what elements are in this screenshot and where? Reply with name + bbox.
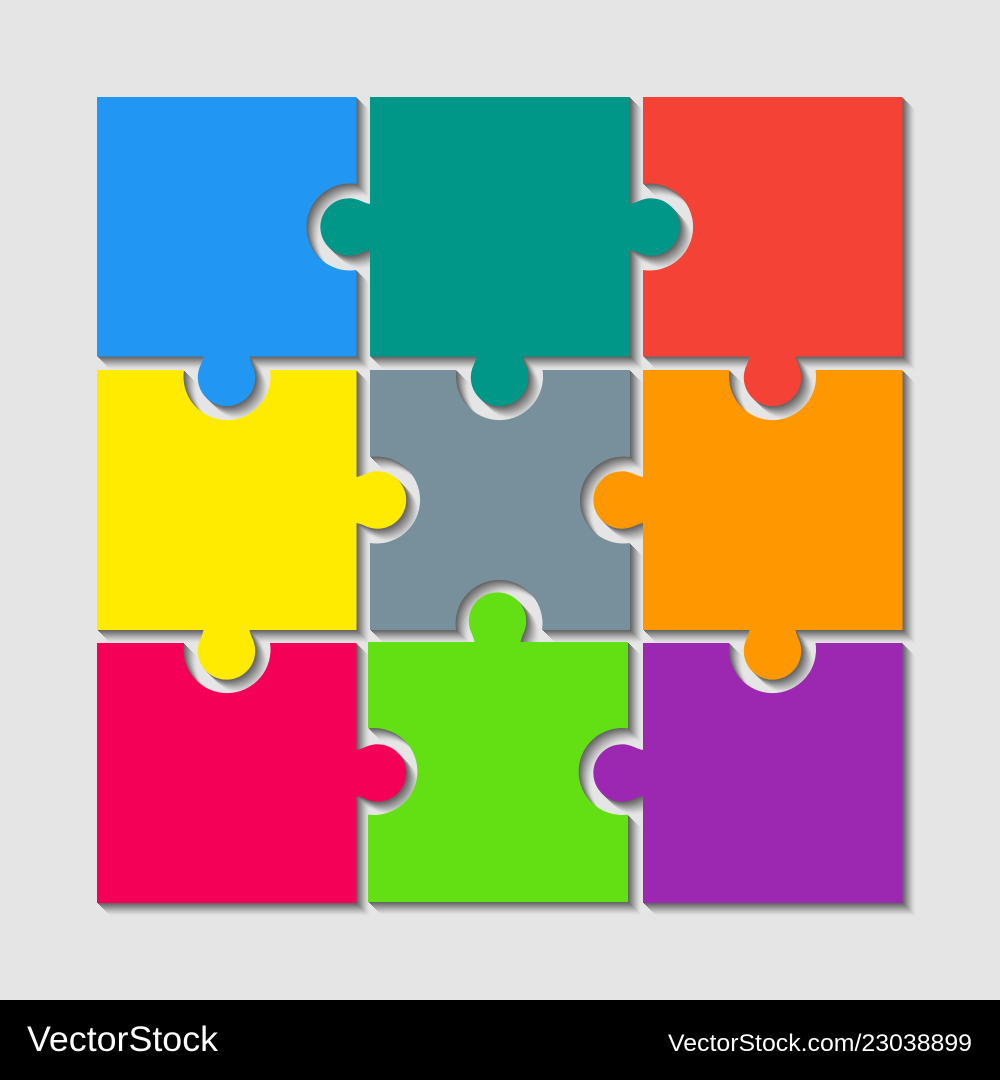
puzzle piece: purple [593, 643, 902, 903]
footer brand text: VectorStock [27, 1020, 219, 1059]
puzzle piece: red [643, 97, 902, 406]
puzzle piece: crimson [97, 643, 406, 903]
puzzle piece: green [368, 592, 628, 902]
puzzle piece: yellow [97, 370, 406, 680]
footer image id text: VectorStock.com/23038899 [668, 1030, 972, 1057]
footer bar [0, 1000, 1000, 1080]
puzzle piece: orange [593, 370, 902, 680]
puzzle piece: teal [320, 97, 680, 406]
puzzle piece: blue-grey centre [370, 370, 630, 630]
puzzle piece: blue [97, 97, 356, 406]
stepped drop shadows under all pieces [98, 98, 916, 916]
